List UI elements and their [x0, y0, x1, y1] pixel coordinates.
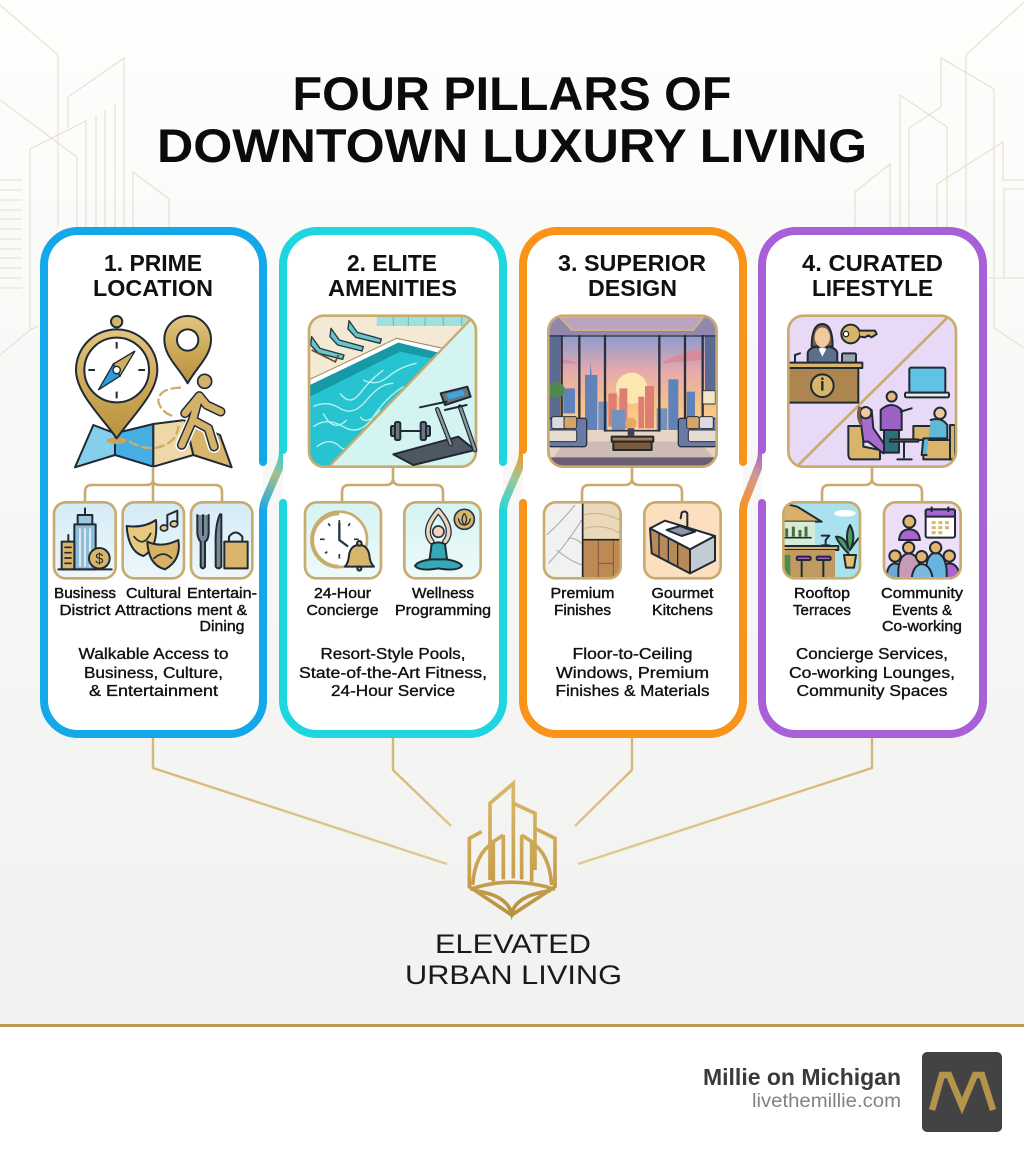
- description: Windows, Premium: [556, 665, 709, 682]
- icon: entertainment and dining: [191, 502, 252, 578]
- sub labels: [54, 586, 257, 635]
- footer brand text: livethemillie.com: [752, 1091, 901, 1112]
- gold lines converging on logo: [153, 738, 872, 864]
- description: Finishes & Materials: [556, 683, 710, 700]
- icon: wellness programming: [404, 502, 481, 578]
- icon: gold skyline crest logo: [469, 783, 555, 915]
- heading: [558, 250, 706, 301]
- panel: 3. superior design: [523, 231, 762, 734]
- description: Community Spaces: [796, 683, 948, 700]
- heading: [802, 250, 943, 301]
- sub labels: [306, 586, 491, 619]
- connector to panel 4: [743, 450, 762, 512]
- heading: AMENITIES: [328, 275, 457, 301]
- panel: 2. elite amenities: [283, 231, 523, 734]
- icon: floor-to-ceiling window living room: [548, 316, 717, 467]
- connector to panel 3: [503, 450, 523, 512]
- description: Walkable Access to: [78, 646, 228, 663]
- description: [556, 646, 710, 700]
- icon: premium finishes: [544, 502, 621, 578]
- description: State-of-the-Art Fitness,: [299, 665, 487, 682]
- sub labels: Rooftop: [794, 586, 850, 602]
- icon: rooftop terraces: [783, 502, 860, 580]
- sub labels: Kitchens: [652, 603, 713, 619]
- sub labels: [793, 586, 964, 635]
- branch connector: [85, 467, 222, 502]
- sub labels: Concierge: [306, 603, 378, 619]
- footer band: [0, 1024, 1024, 1154]
- icon: concierge desk and co-working lounge: [788, 316, 956, 467]
- left sofa: [548, 417, 587, 447]
- title: FOUR PILLARS OF: [292, 67, 732, 120]
- sub labels: Entertain-: [187, 586, 257, 602]
- branch connector: [342, 467, 443, 502]
- icon: business district: $: [95, 552, 103, 568]
- icon: cultural attractions: [123, 502, 184, 578]
- heading: LIFESTYLE: [812, 275, 933, 301]
- heading: 4. CURATED: [802, 250, 943, 276]
- icon: Millie logo badge: [922, 1052, 1002, 1132]
- icon: community events and co-working: [884, 502, 961, 578]
- description: Co-working Lounges,: [789, 665, 955, 682]
- sub labels: Dining: [200, 619, 244, 635]
- heading: 1. PRIME: [104, 250, 202, 276]
- description: Concierge Services,: [796, 646, 948, 663]
- sub labels: Gourmet: [652, 586, 714, 602]
- heading: DESIGN: [588, 275, 677, 301]
- description: Floor-to-Ceiling: [572, 646, 692, 663]
- icon: 24-hour concierge: [305, 502, 381, 578]
- branch connector: [582, 467, 682, 502]
- sub labels: ment &: [197, 603, 247, 619]
- sub labels: District: [60, 603, 110, 619]
- icon: compass pin, map and walker: [75, 316, 232, 467]
- sub labels: Community: [881, 586, 964, 602]
- title: DOWNTOWN LUXURY LIVING: [157, 119, 867, 172]
- sub labels: Terraces: [793, 603, 851, 619]
- title: [157, 67, 867, 172]
- sub labels: Attractions: [115, 603, 192, 619]
- right sofa: [678, 417, 717, 447]
- panel: 4. curated lifestyle: [762, 231, 983, 734]
- text: elevated urban living: [405, 929, 622, 990]
- description: Business, Culture,: [84, 665, 223, 682]
- icon: pool and fitness: [309, 316, 476, 468]
- icon: business district: [54, 502, 116, 578]
- text: elevated urban living: URBAN LIVING: [405, 960, 622, 990]
- sub labels: Events &: [892, 603, 952, 619]
- description: [299, 646, 487, 700]
- heading: 2. ELITE: [347, 250, 437, 276]
- heading: [328, 250, 457, 301]
- sub labels: [550, 586, 714, 619]
- footer brand text: Millie on Michigan: [703, 1064, 901, 1090]
- description: [78, 646, 228, 700]
- sub labels: 24-Hour: [314, 586, 371, 602]
- skyline line art: right: [855, 2, 1024, 348]
- panel: 1. prime location: [44, 231, 283, 734]
- description: & Entertainment: [89, 683, 219, 700]
- sub labels: Cultural: [126, 586, 181, 602]
- text: elevated urban living: ELEVATED: [435, 929, 591, 959]
- sub labels: Co-working: [882, 619, 962, 635]
- connector to panel 2: [263, 450, 283, 512]
- sub labels: Premium: [550, 586, 614, 602]
- footer brand text: [703, 1064, 901, 1112]
- branch connector: [822, 467, 922, 502]
- sub labels: Finishes: [554, 603, 611, 619]
- description: [789, 646, 955, 700]
- heading: 3. SUPERIOR: [558, 250, 706, 276]
- sub labels: Wellness: [412, 586, 474, 602]
- sub labels: Programming: [395, 603, 491, 619]
- description: 24-Hour Service: [331, 683, 455, 700]
- heading: [93, 250, 213, 301]
- heading: LOCATION: [93, 275, 213, 301]
- icon: gourmet kitchens: [644, 502, 721, 578]
- sub labels: Business: [54, 586, 116, 602]
- skyline line art: left: [0, 5, 169, 355]
- description: Resort-Style Pools,: [320, 646, 466, 663]
